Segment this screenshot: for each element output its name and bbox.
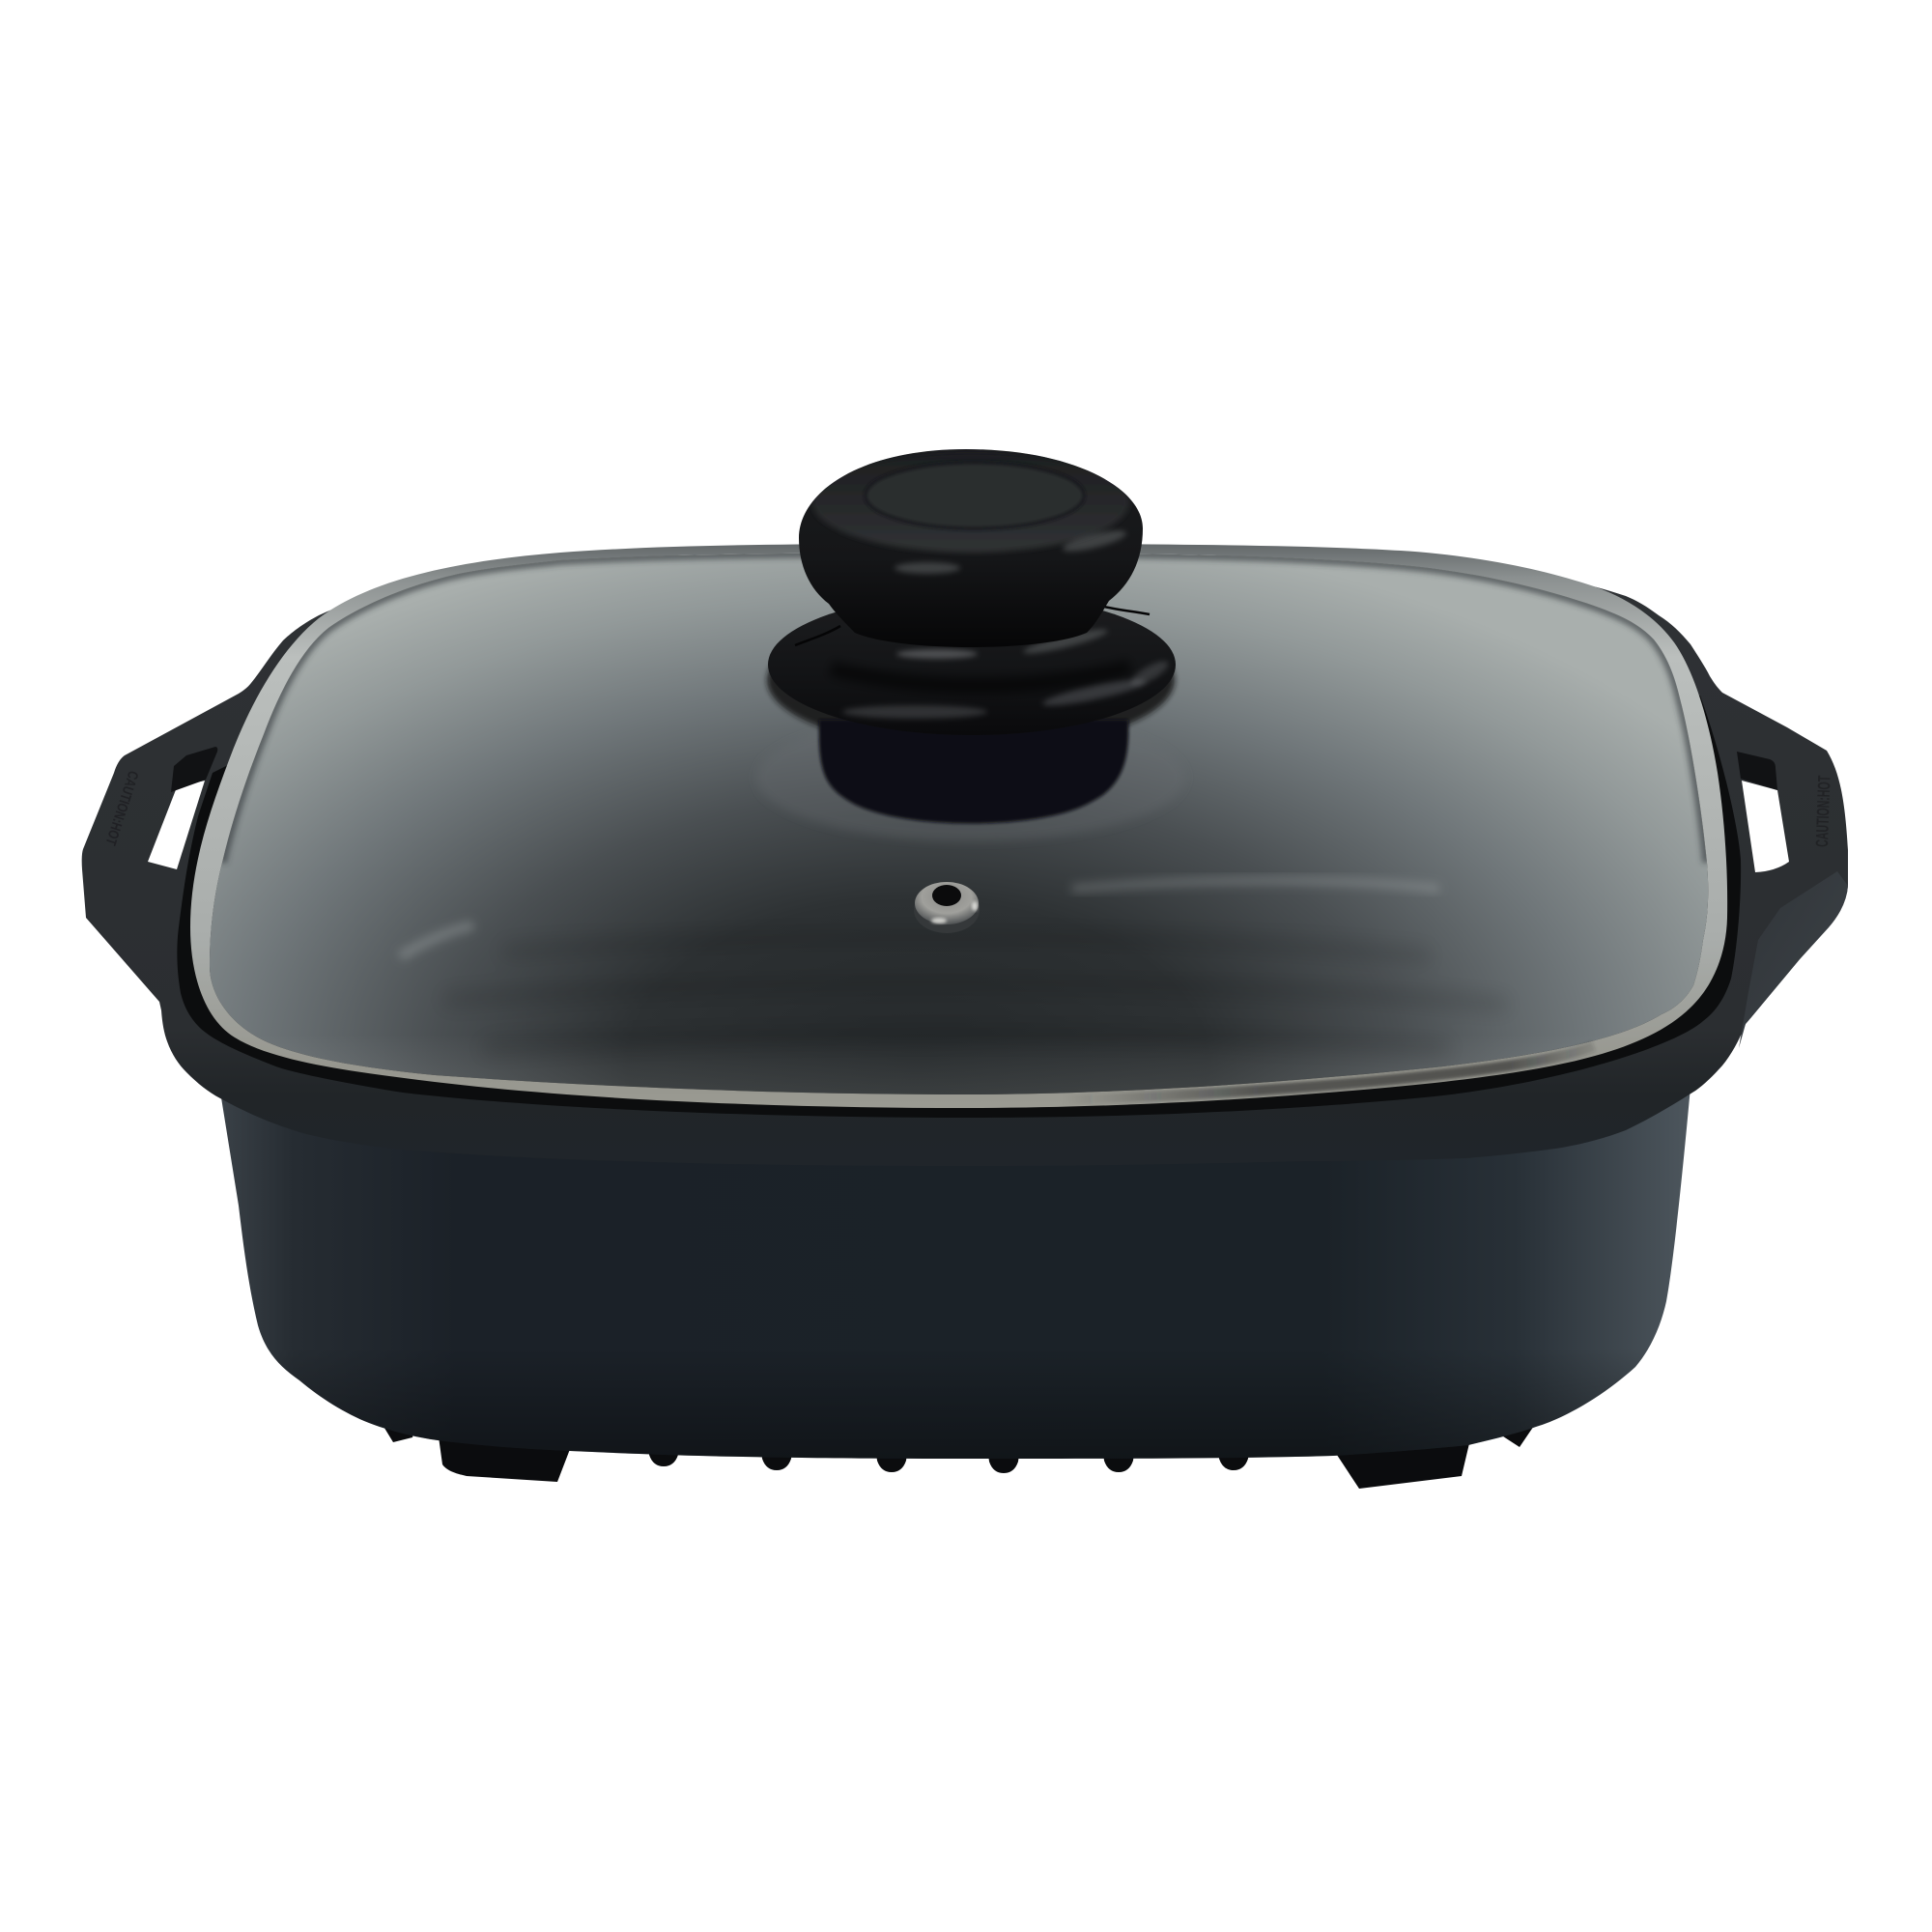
knob reflection in glass xyxy=(756,611,1185,841)
right handle opening xyxy=(1737,752,1789,872)
left handle opening xyxy=(148,747,217,869)
pan interior dark bands xyxy=(444,938,1507,1048)
pot body xyxy=(220,1087,1690,1459)
steam vent xyxy=(914,882,980,933)
glass lid xyxy=(193,541,1739,1101)
interior sheen streak left xyxy=(400,925,473,956)
interior sheen streak right xyxy=(1072,881,1439,889)
embossed handle text left: CAUTION:HOT xyxy=(101,769,141,847)
darker ring section lower right xyxy=(1063,1046,1594,1100)
embossed handle text right: CAUTION:HOT xyxy=(1812,775,1834,847)
rim and side handles xyxy=(82,555,1848,1166)
dark gasket under metal ring xyxy=(177,696,1741,1118)
product illustration: covered pot xyxy=(81,449,1848,1489)
right handle lower facet xyxy=(1739,871,1848,1048)
feet and base nubs xyxy=(380,1420,1538,1489)
lid knob xyxy=(768,449,1176,735)
knob cap xyxy=(799,449,1143,647)
knob base xyxy=(768,594,1176,735)
metal lid ring xyxy=(190,544,1727,1108)
knob neck xyxy=(850,580,1092,645)
glass inner edge shadow xyxy=(222,553,1707,863)
